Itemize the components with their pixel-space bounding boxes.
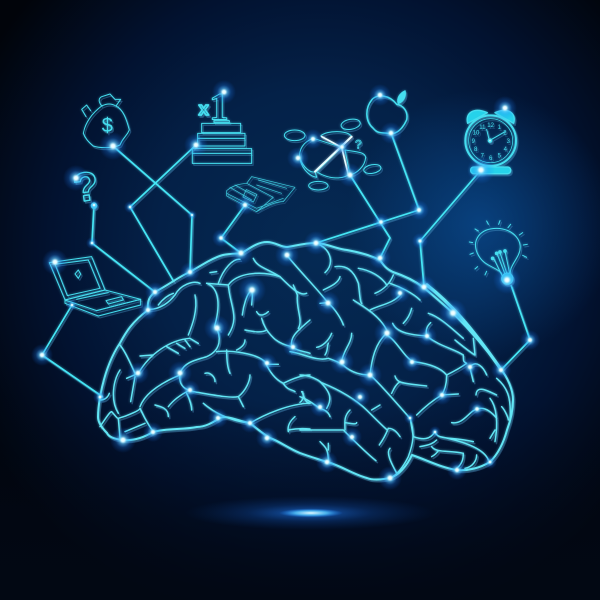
icon: pie chart: ? xyxy=(355,137,362,151)
icon: laptop xyxy=(49,257,141,316)
icon: alarm clock: 1 xyxy=(498,125,502,131)
icon: alarm clock: 8 xyxy=(474,147,478,153)
icon: alarm clock: 4 xyxy=(504,147,508,153)
brain outline xyxy=(98,242,513,480)
icon: number one podium xyxy=(192,84,252,163)
icon: pie chart xyxy=(284,118,382,190)
icon: money bag xyxy=(82,94,129,148)
thick upper right rim xyxy=(427,285,500,368)
icon: alarm clock: 11 xyxy=(479,125,486,131)
icon: alarm clock: 10 xyxy=(473,131,480,137)
icon: alarm clock: 9 xyxy=(472,139,476,145)
icon: alarm clock xyxy=(465,110,516,174)
icons xyxy=(49,84,527,316)
icon: alarm clock: 5 xyxy=(498,153,502,159)
icon: alarm clock: 12 xyxy=(487,123,495,129)
glowing nodes xyxy=(31,80,540,490)
icon: alarm clock: 6 xyxy=(489,156,493,162)
floor light xyxy=(185,496,435,530)
icon: alarm clock: 3 xyxy=(507,139,511,145)
icon: question mark: ? xyxy=(70,162,101,211)
icon: number one podium: x xyxy=(198,98,209,119)
brain xyxy=(98,242,513,480)
icon: open book xyxy=(227,177,295,212)
icon: money bag: $ xyxy=(102,115,113,137)
icon: light bulb xyxy=(469,221,527,284)
left lobe folds xyxy=(100,258,310,438)
icon: alarm clock: 7 xyxy=(481,153,485,159)
right lobe folds xyxy=(287,245,510,478)
icon: number one podium: 1 xyxy=(209,84,229,128)
connection wires xyxy=(42,133,530,397)
icon: apple xyxy=(367,91,407,134)
icon: alarm clock: 2 xyxy=(503,131,507,137)
